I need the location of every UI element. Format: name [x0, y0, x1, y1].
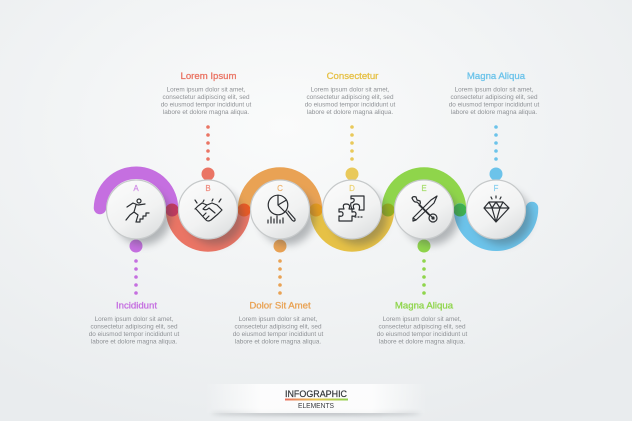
text block: Lorem Ipsum	[161, 71, 252, 116]
text block: Incididunt: labore et dolore magna aliqua.	[91, 338, 177, 346]
step F disc	[466, 180, 526, 239]
text block: Lorem Ipsum: labore et dolore magna aliqua.	[163, 109, 249, 116]
step F disc: F	[494, 184, 499, 193]
text block: Consectetur: consectetur adipiscing elit, sed	[306, 94, 394, 101]
text block: Magna Aliqua top	[449, 71, 540, 116]
icon: running up stairs	[126, 199, 149, 222]
step C disc: C	[277, 184, 283, 193]
text block: Dolor Sit Amet: do eiusmod tempor incididunt ut	[233, 331, 324, 338]
text block: Dolor Sit Amet	[233, 300, 324, 346]
text block: Magna Aliqua top: do eiusmod tempor incididunt ut	[449, 102, 540, 108]
connector A	[130, 240, 142, 295]
connector D	[346, 125, 358, 180]
text block: Magna Aliqua bottom: do eiusmod tempor incididunt ut	[377, 331, 468, 338]
text block: Incididunt: Lorem ipsum dolor sit amet,	[95, 316, 174, 323]
icon: wrench and pencil	[412, 196, 437, 222]
text block: Magna Aliqua bottom: Lorem ipsum dolor sit amet,	[383, 316, 462, 323]
text block: Lorem Ipsum: consectetur adipiscing elit, sed	[162, 94, 250, 101]
text block: Incididunt: Incididunt	[116, 300, 157, 312]
text block: Consectetur: Consectetur	[327, 71, 379, 82]
logo banner: ELEMENTS	[298, 403, 334, 410]
text block: Dolor Sit Amet: labore et dolore magna aliqua.	[235, 338, 321, 346]
text block: Incididunt	[89, 300, 180, 346]
text block: Magna Aliqua top: labore et dolore magna aliqua.	[451, 109, 537, 116]
step E disc	[394, 180, 454, 239]
text block: Consectetur: labore et dolore magna aliqua.	[307, 109, 393, 116]
icon: handshake	[195, 199, 222, 221]
connector F	[490, 125, 502, 180]
step B disc	[178, 180, 238, 239]
disc shadows	[115, 189, 531, 245]
step B disc: B	[205, 184, 211, 193]
text block: Consectetur	[305, 71, 396, 116]
icon: puzzle pieces	[339, 196, 364, 221]
text block: Magna Aliqua bottom: labore et dolore magna aliqua.	[379, 338, 465, 346]
step A disc	[106, 180, 166, 239]
text block: Lorem Ipsum: Lorem ipsum dolor sit amet,	[167, 86, 246, 94]
icon: magnifier chart	[268, 195, 295, 223]
step D disc	[322, 180, 382, 239]
step C disc	[250, 180, 310, 239]
timeline ribbon	[100, 173, 532, 246]
text block: Magna Aliqua top: consectetur adipiscing elit, sed	[450, 94, 538, 101]
connector B	[202, 125, 214, 180]
step A disc: A	[133, 184, 139, 193]
step E disc: E	[421, 184, 427, 193]
icon: diamond	[484, 196, 509, 222]
text block: Consectetur: Lorem ipsum dolor sit amet,	[311, 86, 390, 94]
text block: Dolor Sit Amet: consectetur adipiscing elit, sed	[234, 324, 322, 330]
text block: Incididunt: do eiusmod tempor incididunt ut	[89, 331, 180, 338]
logo banner	[205, 384, 427, 415]
text block: Magna Aliqua bottom	[377, 300, 468, 346]
text block: Dolor Sit Amet: Dolor Sit Amet	[249, 300, 311, 312]
text block: Dolor Sit Amet: Lorem ipsum dolor sit amet,	[239, 316, 318, 323]
step D disc: D	[349, 184, 355, 193]
text block: Consectetur: do eiusmod tempor incididunt ut	[305, 102, 396, 108]
text block: Lorem Ipsum: Lorem Ipsum	[181, 71, 236, 82]
ribbon junctions	[166, 204, 466, 216]
connector C	[274, 240, 286, 295]
text block: Lorem Ipsum: do eiusmod tempor incididunt ut	[161, 102, 252, 108]
text block: Incididunt: consectetur adipiscing elit, sed	[90, 324, 178, 330]
text block: Magna Aliqua bottom: Magna Aliqua	[395, 300, 454, 312]
connector E	[418, 240, 430, 295]
logo banner: INFOGRAPHIC	[285, 389, 347, 400]
text block: Magna Aliqua bottom: consectetur adipiscing elit, sed	[378, 324, 466, 330]
text block: Magna Aliqua top: Magna Aliqua	[467, 71, 526, 82]
text block: Magna Aliqua top: Lorem ipsum dolor sit amet,	[455, 86, 534, 94]
